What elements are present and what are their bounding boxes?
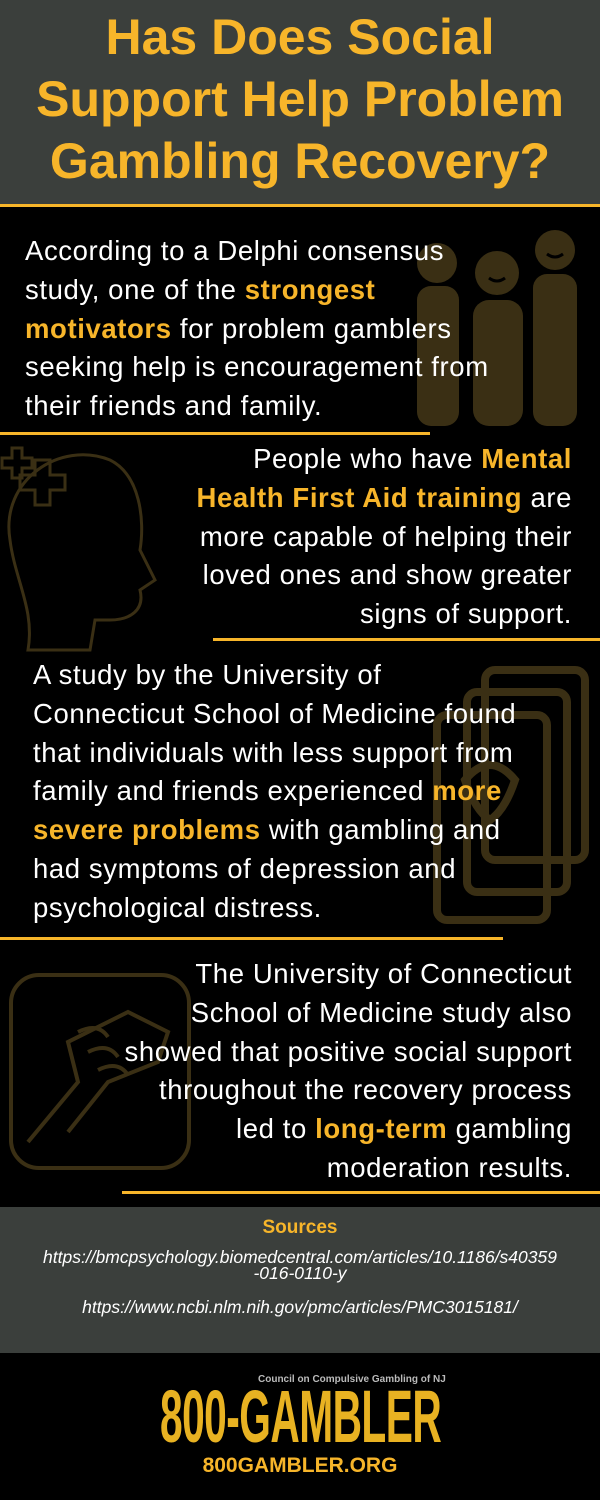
title [36,9,564,189]
title: Has Does Social [105,9,495,65]
icon: family [417,230,577,426]
logo: 800-GAMBLER: Council on Compulsive Gambling of NJ [258,1374,446,1385]
text: paragraph 3: A study by the University of [33,659,381,690]
text: paragraph 4 [124,958,572,1183]
icon: handshake [9,973,191,1170]
icon: playing cards [433,666,589,924]
text: paragraph 3: had symptoms of depression and [33,853,456,884]
text: paragraph 2: Health First Aid training are [197,482,572,513]
text: paragraph 3: family and friends experienced more [33,775,502,806]
text: paragraph 3: that individuals with less support from [33,737,513,768]
source links: -016-0110-y [253,1263,347,1283]
text: paragraph 4: throughout the recovery process [159,1074,572,1105]
logo: 800-GAMBLER: 800GAMBLER.ORG [203,1454,397,1477]
text: paragraph 2: loved ones and show greater [203,559,572,590]
text: paragraph 2: signs of support. [360,598,572,629]
text: paragraph 2: People who have Mental [253,443,572,474]
text: paragraph 3: Connecticut School of Medicine found [33,698,516,729]
text: paragraph 3 [33,659,516,923]
sources heading: Sources [262,1217,337,1238]
text: paragraph 4: The University of Connecticut [195,958,572,989]
logo: 800-GAMBLER: 800-GAMBLER [160,1375,441,1458]
title: Support Help Problem [36,71,564,127]
text: paragraph 4: School of Medicine study also [191,997,572,1028]
header panel [0,0,600,205]
text: paragraph 1: their friends and family. [25,390,322,421]
text: paragraph 3: severe problems with gambling and [33,814,501,845]
text: paragraph 2: more capable of helping their [200,521,572,552]
text: paragraph 1: study, one of the strongest [25,274,375,305]
panel: sources: https://www.ncbi.nlm.nih.gov/pmc/articles/PMC3015181/ [82,1297,518,1317]
title: Gambling Recovery? [50,133,550,189]
text: paragraph 4: showed that positive social support [124,1036,572,1067]
panel: sources [0,1207,600,1353]
source links [43,1247,557,1283]
text: paragraph 2 [197,443,572,629]
text: paragraph 3: psychological distress. [33,892,322,923]
text: paragraph 1: According to a Delphi consensus [25,235,444,266]
text: paragraph 1: motivators for problem gamblers [25,313,452,344]
source links: https://bmcpsychology.biomedcentral.com/articles/10.1186/s40359 [43,1247,557,1267]
text: paragraph 4: moderation results. [327,1152,572,1183]
icon: head with plus [0,446,157,652]
text: paragraph 1 [25,235,489,421]
text: paragraph 1: seeking help is encouragement from [25,351,489,382]
text: paragraph 4: led to long-term gambling [236,1113,572,1144]
